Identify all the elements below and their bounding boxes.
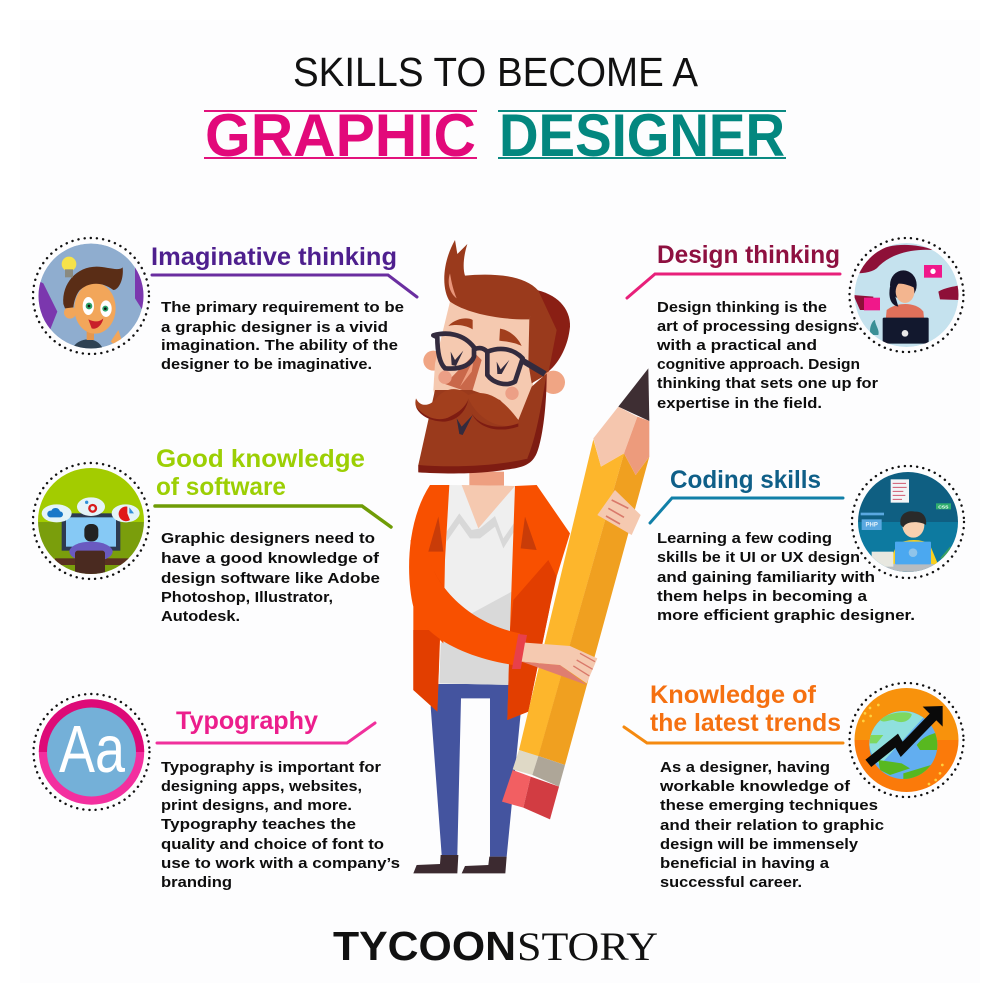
- heading: the latest trends: [650, 709, 841, 737]
- body text: art of processing designs: [657, 319, 857, 335]
- body text: Typography is important for: [161, 760, 381, 776]
- panel: coding skills: [650, 465, 970, 624]
- body text: [656, 300, 878, 412]
- body text: workable knowledge of: [659, 779, 850, 795]
- upper hand on pencil: [597, 490, 641, 535]
- body text: these emerging techniques: [660, 798, 878, 814]
- body text: The primary requirement to be: [161, 300, 404, 316]
- body text: successful career.: [660, 875, 802, 891]
- body text: print designs, and more.: [161, 798, 352, 814]
- connector: [624, 727, 843, 743]
- shirt: [439, 485, 515, 685]
- body text: expertise in the field.: [657, 396, 822, 412]
- connector: [155, 506, 391, 527]
- trousers: [431, 684, 521, 857]
- body text: [161, 531, 380, 625]
- connector: [650, 498, 843, 523]
- body text: branding: [161, 875, 232, 891]
- nose and cheeks: [438, 353, 519, 400]
- body text: [659, 760, 884, 891]
- body text: [657, 531, 915, 624]
- title line: skills to become a: SKILLS TO BECOME A: [293, 49, 699, 95]
- body text: design software like Adobe: [161, 571, 380, 587]
- shoes: [413, 855, 507, 873]
- icon: boy coding at laptop: PHP: [866, 523, 878, 529]
- mouth: [457, 415, 473, 435]
- title word: designer: DESIGNER: [499, 102, 785, 169]
- body text: designer to be imaginative.: [161, 357, 372, 373]
- connector: [627, 274, 840, 298]
- pencil: [502, 368, 649, 819]
- body text: beneficial in having a: [660, 856, 830, 872]
- body text: have a good knowledge of: [161, 551, 379, 567]
- connector: [152, 275, 417, 297]
- body text: Typography teaches the: [161, 817, 356, 833]
- panel: typography: [34, 694, 400, 891]
- body text: them helps in becoming a: [657, 589, 868, 605]
- right ear: [542, 371, 565, 394]
- icon: boy with light bulb: [33, 238, 153, 354]
- body text: a graphic designer is a vivid: [161, 320, 388, 336]
- body text: cognitive approach. Design: [657, 357, 860, 373]
- body text: Photoshop, Illustrator,: [161, 590, 333, 606]
- closed eyes: [451, 351, 509, 374]
- heading: Good knowledge: [156, 445, 365, 473]
- lower hand on pencil: [522, 643, 597, 685]
- panel: knowledge of the latest trends: [624, 681, 965, 891]
- body text: quality and choice of font to: [161, 837, 384, 853]
- body text: use to work with a company’s: [161, 856, 400, 872]
- connector: [157, 723, 375, 743]
- body text: imagination. The ability of the: [161, 338, 398, 354]
- heading: Typography: [176, 707, 318, 735]
- heading: [156, 445, 365, 501]
- icon: Aa letters: [34, 694, 150, 810]
- body text: and gaining familiarity with: [657, 570, 875, 586]
- body text: skills be it UI or UX design: [657, 550, 860, 566]
- face: [433, 302, 533, 430]
- body text: design will be immensely: [660, 837, 858, 853]
- body text: with a practical and: [656, 338, 817, 354]
- left ear: [423, 351, 443, 371]
- body text: [161, 760, 400, 891]
- jacket: [409, 485, 570, 720]
- icon: person at computer: [30, 460, 155, 582]
- neck: [462, 472, 515, 528]
- icon: woman at laptop: [850, 238, 964, 352]
- footer logo: tycoonstory: STORY: [517, 924, 658, 969]
- heading: Design thinking: [657, 241, 840, 269]
- body text: thinking that sets one up for: [657, 376, 878, 392]
- eyebrows: [448, 318, 522, 346]
- body text: [161, 300, 404, 373]
- panel: design thinking: [627, 238, 964, 412]
- panel: good knowledge of software: [30, 445, 391, 625]
- arm across the body: [411, 540, 527, 669]
- heading: [650, 681, 841, 737]
- body text: Graphic designers need to: [161, 531, 375, 547]
- icon: boy coding at laptop: CSS: [938, 504, 949, 510]
- body text: Learning a few coding: [657, 531, 832, 547]
- panel: imaginative thinking: [33, 238, 417, 373]
- icon: globe with rising arrow: [850, 683, 965, 800]
- body text: designing apps, websites,: [161, 779, 362, 795]
- icon: boy coding at laptop: [850, 465, 970, 582]
- glasses: [433, 334, 545, 384]
- hair: [444, 240, 570, 383]
- title: [204, 49, 786, 169]
- title word: graphic: GRAPHIC: [205, 102, 476, 169]
- body text: Design thinking is the: [657, 300, 827, 316]
- moustache: [415, 389, 518, 430]
- body text: and their relation to graphic: [660, 818, 884, 834]
- footer logo: tycoonstory: [333, 923, 658, 969]
- heading: Coding skills: [670, 466, 821, 494]
- body text: Autodesk.: [161, 609, 240, 625]
- heading: of software: [156, 473, 286, 501]
- footer logo: tycoonstory: TYCOON: [333, 923, 516, 969]
- heading: Imaginative thinking: [151, 243, 397, 271]
- body text: more efficient graphic designer.: [657, 608, 915, 624]
- illustration: designer holding a giant pencil: [409, 240, 649, 873]
- icon: Aa letters: Aa: [59, 712, 126, 787]
- heading: Knowledge of: [650, 681, 817, 709]
- beard: [418, 373, 547, 473]
- body text: As a designer, having: [660, 760, 830, 776]
